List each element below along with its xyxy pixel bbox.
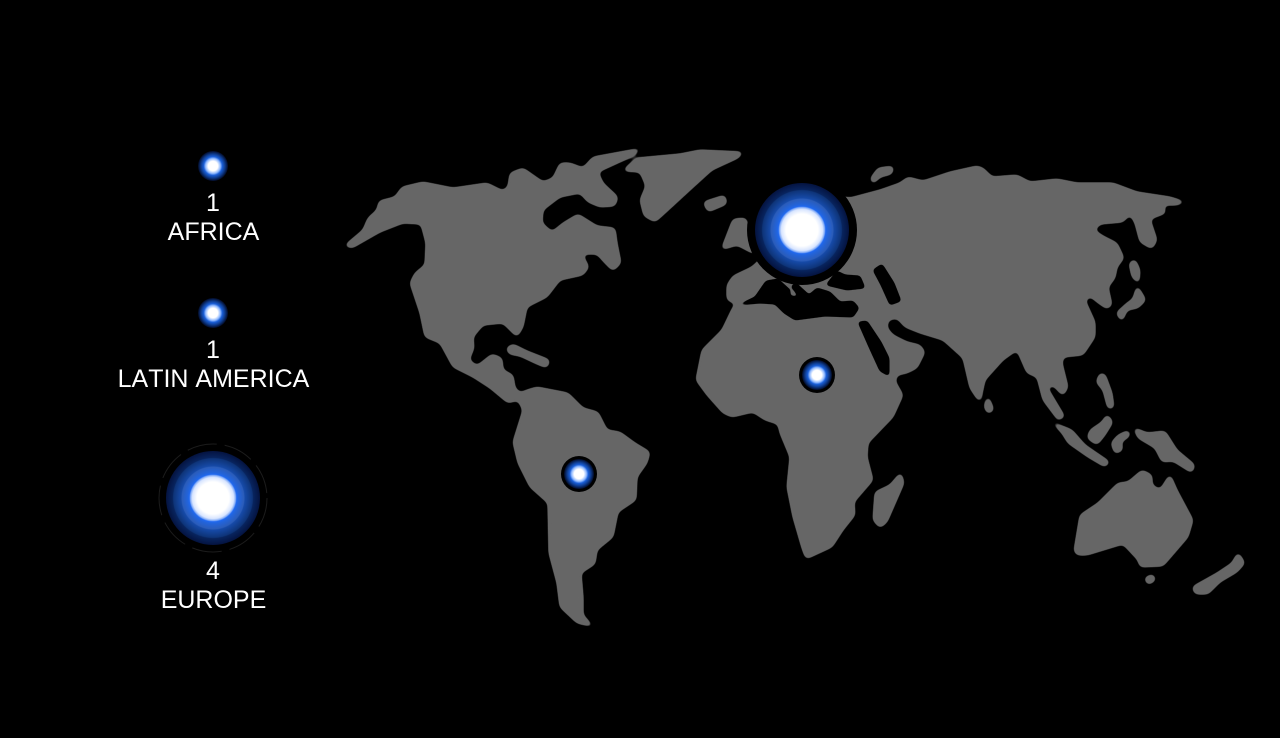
- legend icon: Latin America: [198, 298, 228, 328]
- island: Honshu: [1116, 285, 1146, 322]
- island: Hokkaido: [1129, 259, 1140, 284]
- island: Cuba: [506, 344, 550, 368]
- sea: Mediterranean: [738, 279, 859, 320]
- legend label: Latin America: LATIN AMERICA: [118, 365, 310, 393]
- legend icon: Africa: [198, 151, 228, 181]
- marker: Africa on map: [799, 357, 835, 393]
- world map: [344, 148, 1245, 627]
- legend label: Africa: AFRICA: [168, 218, 260, 246]
- legend item: Latin America: [118, 298, 310, 393]
- inland seas: [738, 264, 901, 376]
- island: Great Britain: [721, 218, 756, 255]
- land masses: [344, 148, 1245, 627]
- island: Sri Lanka: [984, 395, 994, 414]
- landmass: the Americas: [344, 148, 650, 627]
- sea: Caspian: [873, 264, 901, 305]
- island: Iceland: [703, 195, 727, 212]
- island: Greenland: [622, 150, 744, 222]
- marker: Europe on map: [747, 175, 857, 285]
- legend label: Europe: EUROPE: [161, 586, 266, 614]
- island: New Zealand: [1192, 552, 1245, 594]
- legend count: Latin America: 1: [206, 336, 220, 364]
- landmass: Australia: [1074, 470, 1193, 567]
- island: Sulawesi: [1111, 430, 1130, 454]
- island: Sumatra: [1050, 421, 1110, 467]
- island: Borneo: [1087, 414, 1113, 445]
- legend count: Europe: 4: [206, 557, 220, 585]
- legend item: Africa: [168, 151, 260, 246]
- legend count: Africa: 1: [206, 189, 220, 217]
- island: New Guinea: [1133, 427, 1195, 473]
- island: Tasmania: [1144, 574, 1156, 585]
- landmass: Eurasia and Africa: [696, 166, 1186, 559]
- sea: Red Sea: [858, 321, 889, 376]
- island: Arctic: [870, 166, 894, 184]
- legend icon: Europe: [159, 444, 267, 552]
- marker: Latin America on map: [561, 456, 597, 492]
- legend item: Europe: [159, 444, 267, 614]
- island: Philippines: [1096, 373, 1114, 409]
- sea: Black Sea: [826, 271, 865, 290]
- island: Madagascar: [873, 472, 904, 528]
